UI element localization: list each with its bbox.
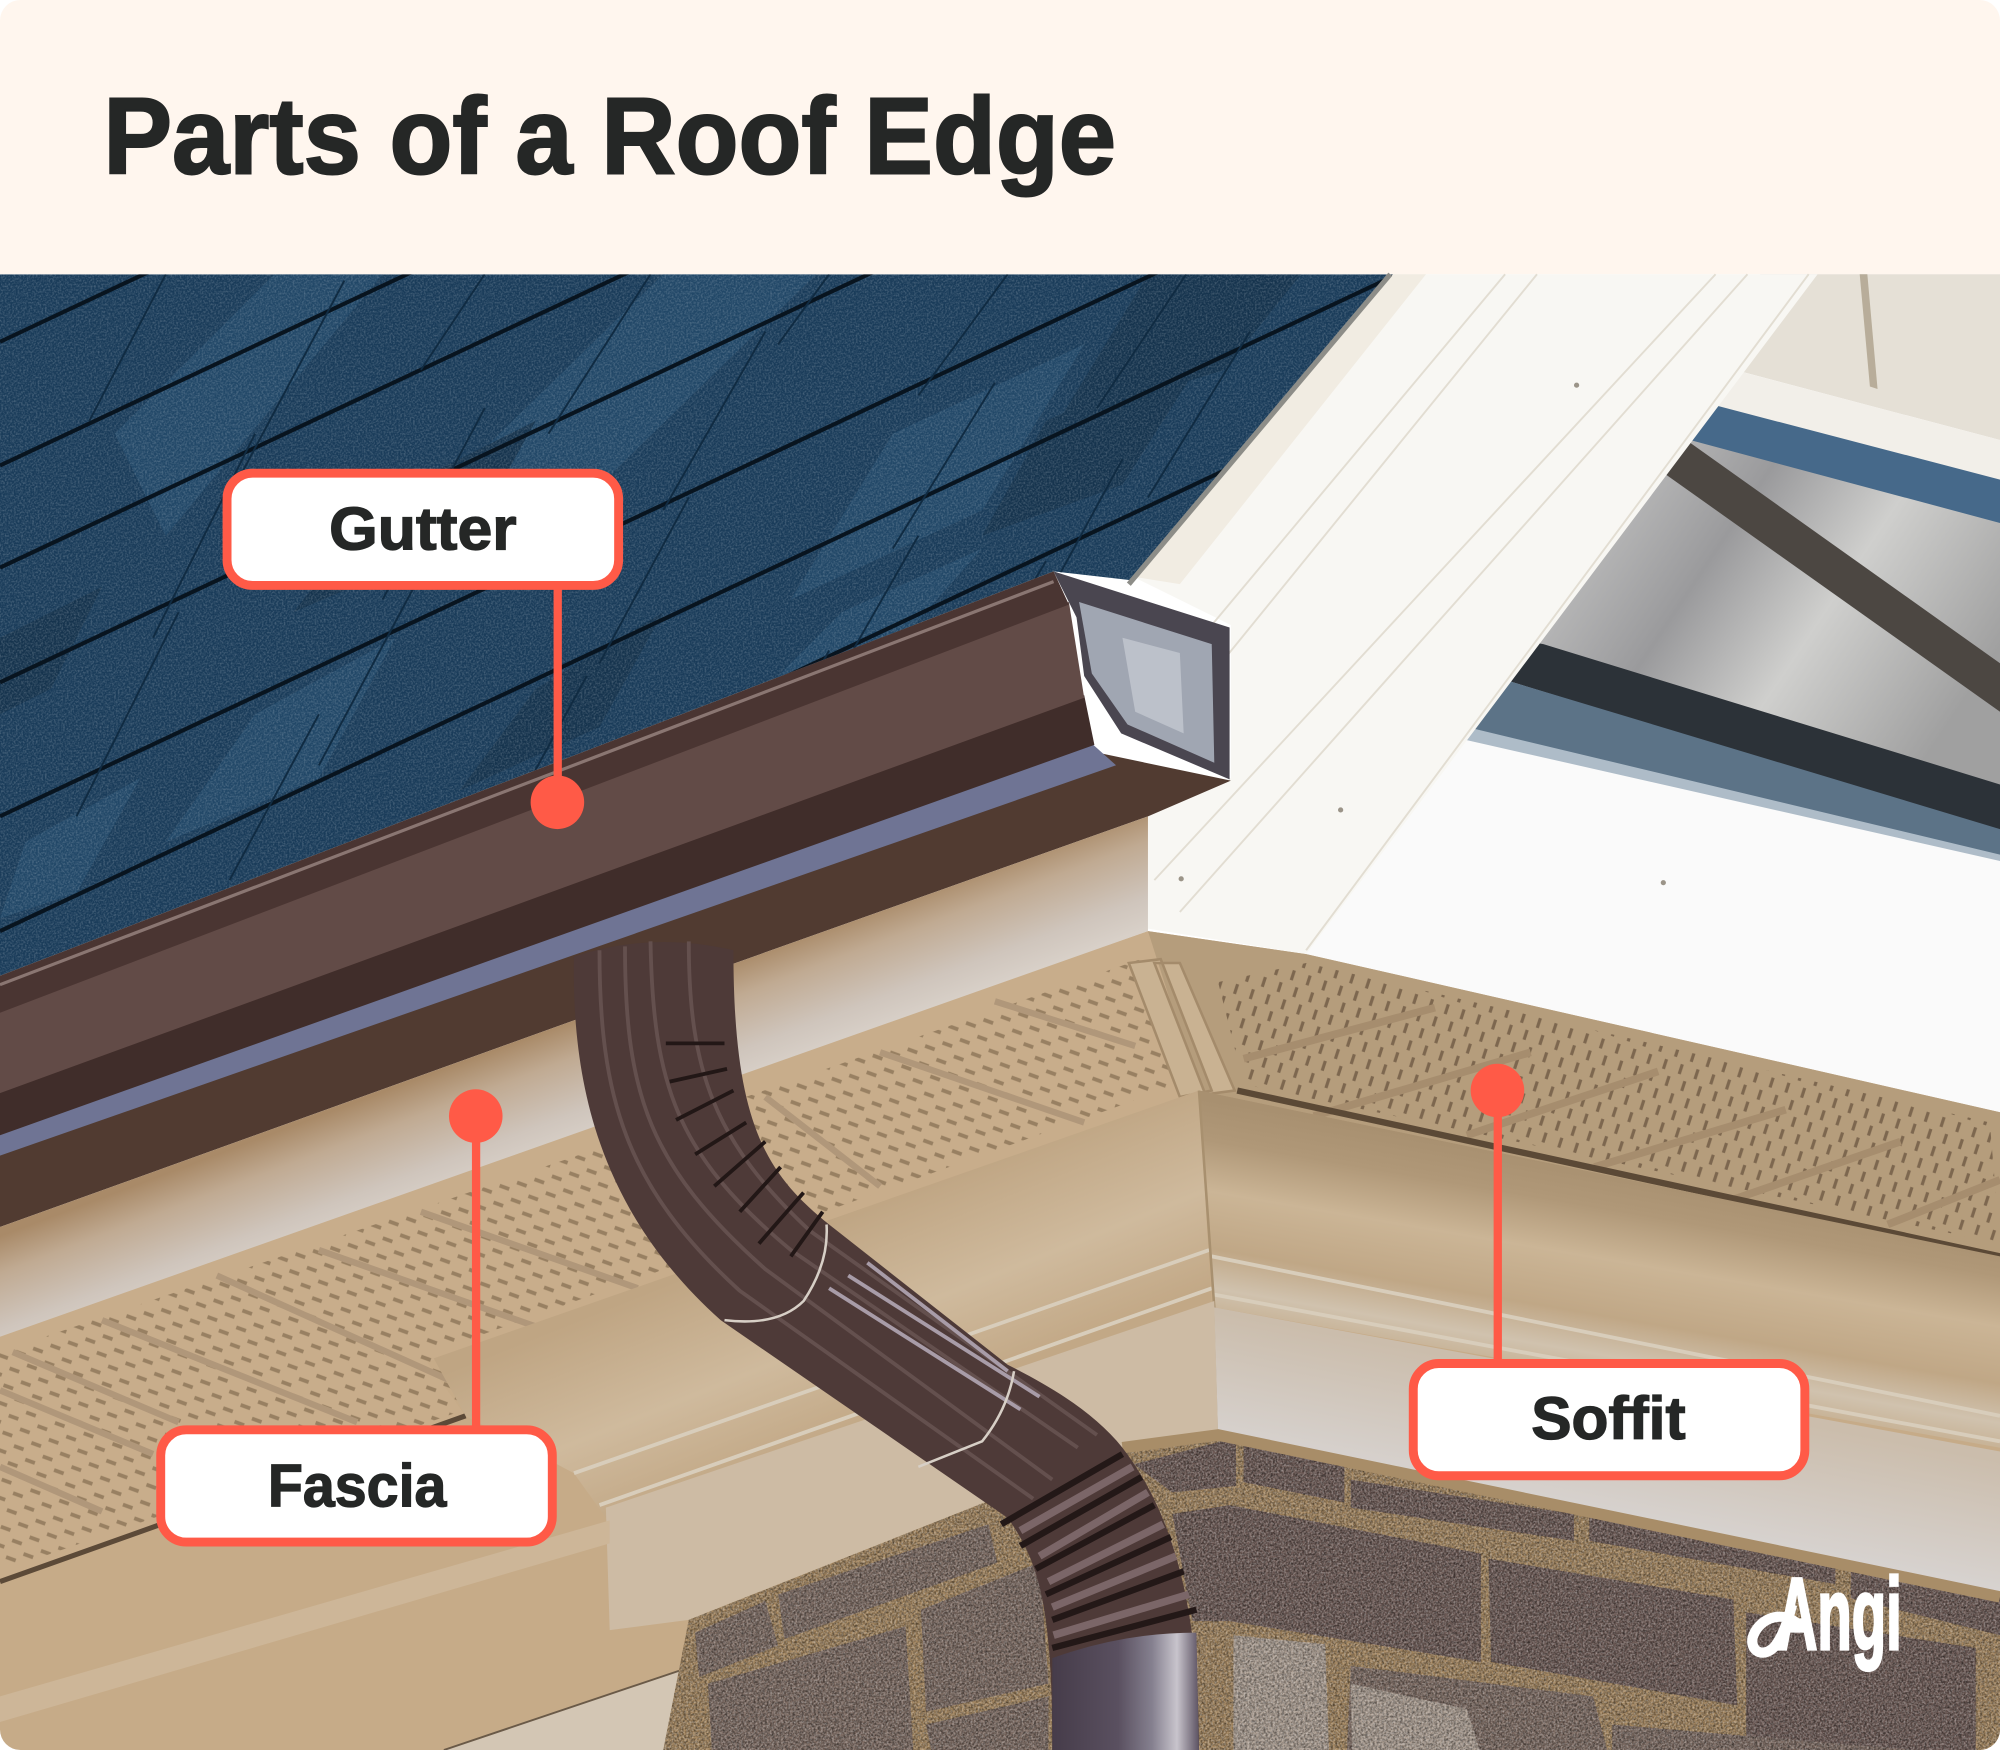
shingle cut lines bbox=[77, 274, 1250, 880]
bottom-left line bbox=[444, 1668, 686, 1750]
soffit leader line bbox=[1494, 1091, 1502, 1362]
roof edge grey flashing bbox=[1129, 274, 1390, 584]
sunlit brick bbox=[1233, 1635, 1480, 1750]
roof shingles bbox=[0, 274, 1393, 976]
gutter leader line bbox=[554, 584, 562, 804]
siding seam bbox=[1860, 274, 1878, 389]
dark bricks bbox=[1134, 1438, 2000, 1750]
fascia label box bbox=[161, 1430, 552, 1542]
lower pipe bbox=[1052, 1633, 1199, 1750]
moulding lines bbox=[574, 1250, 2000, 1505]
white rake panel bbox=[1133, 274, 1818, 954]
corner seam bbox=[1199, 1091, 1218, 1435]
gutter top lip bbox=[0, 571, 1069, 1013]
bottom-left light band bbox=[0, 1520, 610, 1722]
rake grooves bbox=[1154, 274, 1809, 950]
soffit shadow along crown bbox=[1237, 1091, 2000, 1256]
left soffit bbox=[1134, 931, 1148, 936]
dark shingle patches bbox=[0, 274, 1301, 791]
gutter bbox=[0, 571, 1231, 1227]
gutter label box bbox=[227, 473, 619, 585]
gutter end highlight bbox=[1122, 638, 1184, 733]
background siding bbox=[1735, 274, 2000, 440]
title: Parts of a Roof Edge bbox=[103, 75, 1116, 196]
blue reflection strip bbox=[1692, 406, 2000, 523]
gutter dark face bbox=[0, 695, 1094, 1135]
brick noise bbox=[638, 1429, 2000, 1750]
gutter end cap silver bbox=[1079, 602, 1214, 763]
fascia marker dot bbox=[449, 1089, 503, 1143]
white bottom panel bbox=[1461, 740, 2000, 886]
soffit label text: Soffit bbox=[1531, 1385, 1686, 1452]
gutter marker dot bbox=[531, 776, 584, 829]
right soffit bbox=[1148, 931, 2000, 1256]
brick highlights bbox=[638, 1429, 2000, 1750]
soffit corner battens bbox=[1129, 959, 1235, 1097]
left crown moulding bbox=[434, 1091, 1212, 1518]
gutter end cap bbox=[1054, 571, 1230, 779]
label: gutter bbox=[227, 473, 619, 829]
fascia bbox=[0, 816, 1148, 1337]
downspout ridges bbox=[599, 941, 1097, 1499]
upper elbow ticks bbox=[666, 1043, 823, 1256]
right soffit ridges bbox=[1244, 1008, 2000, 1224]
right lower board bbox=[1214, 1307, 2000, 1594]
lower elbow crimps bbox=[1001, 1454, 1196, 1648]
shingle base bbox=[0, 274, 1403, 989]
white trim strip bbox=[1718, 372, 2000, 480]
gutter lit face bbox=[0, 602, 1084, 1093]
soffit marker dot bbox=[1471, 1064, 1524, 1117]
tan underlay bbox=[0, 931, 2000, 1750]
right crown moulding bbox=[1199, 1091, 2000, 1448]
brick top trim bbox=[1122, 1435, 2000, 1597]
left lower board bbox=[606, 1301, 1218, 1630]
rake shadow edge bbox=[1133, 274, 1426, 584]
light shingle patches bbox=[0, 274, 1084, 918]
label: fascia bbox=[161, 1089, 552, 1542]
medium bricks bbox=[695, 1524, 1913, 1750]
metal valley bbox=[1540, 440, 2000, 784]
header banner bbox=[0, 0, 2000, 274]
logo wordmark: Angi bbox=[1777, 1557, 1902, 1671]
logo swash bbox=[1752, 1605, 1796, 1653]
shingle course lines bbox=[0, 274, 1393, 933]
blue-grey flashing bbox=[1476, 682, 2000, 855]
rake nail heads bbox=[1181, 385, 1663, 883]
shingle noise bbox=[0, 274, 1403, 989]
light flashing edge bbox=[1467, 729, 2000, 861]
gutter label text: Gutter bbox=[329, 496, 517, 563]
right soffit perforations bbox=[1218, 963, 2000, 1244]
gutter blue strip bbox=[0, 742, 1116, 1156]
brick wall bbox=[638, 1429, 2000, 1750]
mortar bbox=[638, 1429, 2000, 1750]
gutter lower brown bbox=[0, 753, 1231, 1227]
downspout highlight bbox=[829, 1263, 1040, 1409]
downspout bbox=[574, 941, 1199, 1750]
left soffit perforations bbox=[0, 957, 1180, 1571]
dark brace bbox=[1666, 440, 2000, 712]
left soffit ridges bbox=[0, 1001, 1135, 1511]
dark metal bar bbox=[1492, 638, 2000, 832]
label: soffit bbox=[1413, 1064, 1805, 1476]
downspout body bbox=[574, 942, 1199, 1750]
gutter lip highlight bbox=[0, 582, 1054, 985]
downspout seams bbox=[724, 1224, 1014, 1467]
lower elbow crimp highlights bbox=[1020, 1467, 1189, 1635]
soffit label box bbox=[1413, 1364, 1805, 1476]
left soffit shadow bbox=[0, 1414, 466, 1584]
fascia label text: Fascia bbox=[268, 1452, 447, 1519]
fascia leader line bbox=[472, 1116, 480, 1429]
bottom-left board bbox=[446, 1668, 686, 1750]
Angi logo bbox=[1752, 1557, 1902, 1671]
